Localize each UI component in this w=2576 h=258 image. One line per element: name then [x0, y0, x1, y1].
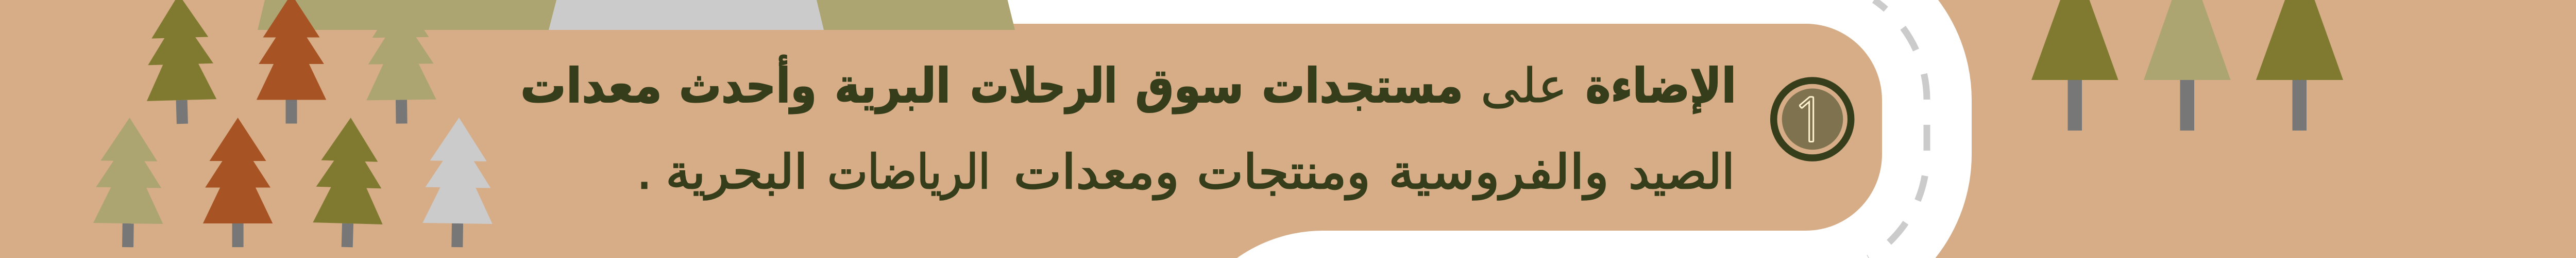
badge ring [1774, 80, 1851, 158]
road centre dashes [1869, 0, 1927, 258]
text line 2 [637, 144, 1735, 200]
badge disc [1782, 89, 1843, 150]
tree group: lower left row [93, 117, 494, 248]
text line 1: الإضاءة [1586, 58, 1736, 114]
text line 2: الصيد [1629, 144, 1735, 200]
tree: khaki [93, 117, 164, 248]
text line 2: البحرية [666, 144, 808, 200]
tree group: upper left row [144, 0, 436, 125]
text line 1: معدات [520, 58, 662, 114]
tree: light grey [422, 117, 494, 248]
text line 1: سوق [1136, 58, 1244, 114]
number badge [1774, 80, 1851, 158]
text line 1: على [1481, 58, 1567, 114]
text line 2: . [637, 144, 652, 200]
text line 1: وأحدث [679, 55, 817, 114]
text line 1 [520, 55, 1736, 114]
text line 2: والفروسية [1388, 144, 1609, 200]
mountain: grey peak [549, 0, 824, 30]
tree: olive [2256, 0, 2343, 131]
mountain: khaki [258, 0, 1015, 30]
white road [979, 0, 1972, 258]
text line 1: مستجدات [1262, 58, 1463, 114]
tree: brown [257, 0, 326, 124]
text line 1: البرية [835, 58, 951, 114]
tree: brown [203, 118, 273, 247]
tree: khaki [2144, 0, 2231, 131]
tree: olive [312, 117, 385, 248]
text line 2: ومنتجات [1197, 144, 1370, 200]
tree: olive [2031, 0, 2119, 131]
tree: olive [144, 0, 217, 125]
tree: khaki [365, 0, 436, 124]
text line 2: الرياضات [827, 144, 990, 200]
text line 2: ومعدات [1014, 144, 1179, 200]
tree group: right row [2031, 0, 2343, 131]
panel: text background [0, 24, 1882, 231]
text line 1: الرحلات [970, 58, 1117, 114]
badge number: 1 [1791, 90, 1827, 150]
